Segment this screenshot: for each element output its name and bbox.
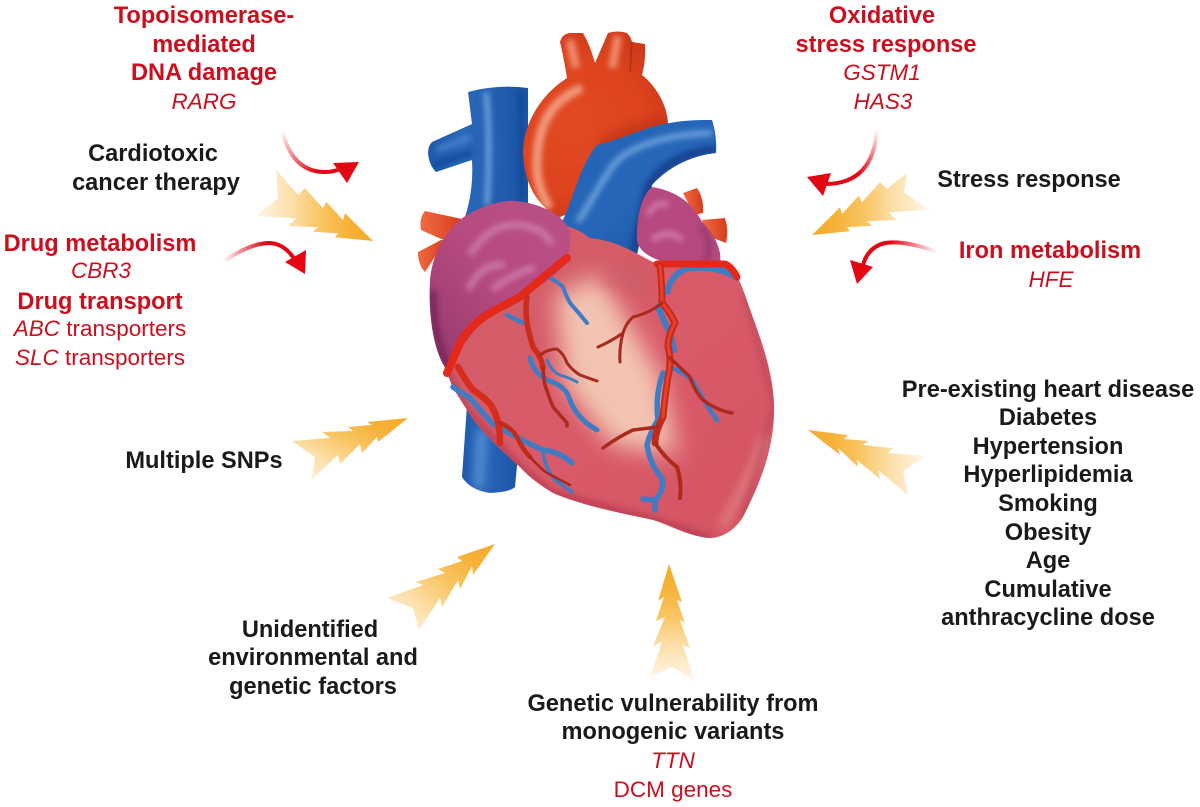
text: pre-existing risk factors: Cumulative (984, 577, 1112, 603)
text: drug metabolism and transport: CBR3 (71, 258, 131, 283)
text: pre-existing risk factors: Age (1026, 548, 1070, 574)
right atrium (430, 201, 570, 370)
text: oxidative stress response: stress response (796, 32, 976, 58)
pulmonary artery (562, 120, 716, 255)
curved arrow: drug metabolism (223, 243, 306, 274)
text: drug metabolism and transport: SLC transporters (15, 345, 185, 370)
text: topoisomerase-mediated DNA damage: DNA damage (131, 60, 277, 86)
arrow: monogenic variants (650, 564, 694, 680)
red pulmonary vein stubs, left (418, 188, 727, 272)
text: pre-existing risk factors: Hypertension (973, 434, 1123, 460)
aortic arch (523, 32, 668, 218)
text: topoisomerase-mediated DNA damage: RARG (171, 89, 237, 114)
text: cardiotoxic cancer therapy: cancer therapy (72, 170, 240, 196)
text: genetic vulnerability (527, 691, 819, 802)
text: pre-existing risk factors: Obesity (1005, 520, 1091, 546)
text: topoisomerase-mediated DNA damage: mediated (152, 32, 256, 58)
text: pre-existing risk factors: anthracycline dose (941, 605, 1155, 631)
text: unidentified factors (208, 617, 418, 700)
arrow: multiple SNPs (292, 418, 408, 479)
text: unidentified factors: Unidentified (242, 617, 378, 643)
illustration: anatomical heart (418, 32, 774, 538)
text: cardiotoxic cancer therapy (72, 141, 240, 196)
left atrium (637, 187, 720, 264)
text: oxidative stress response: HAS3 (854, 89, 913, 114)
text: topoisomerase-mediated DNA damage: Topoisomerase- (114, 3, 294, 29)
text: pre-existing risk factors (902, 377, 1194, 631)
arrow: unidentified factors (387, 544, 495, 630)
text: iron metabolism (959, 238, 1141, 292)
arrow: stress response (812, 173, 929, 235)
inferior vena cava (462, 405, 518, 493)
text: pre-existing risk factors: Pre-existing heart disease (902, 377, 1194, 403)
text: oxidative stress response: Oxidative (829, 3, 935, 29)
text: drug metabolism and transport: ABC transporters (12, 316, 186, 341)
text: unidentified factors: environmental and (208, 645, 418, 671)
superior vena cava (428, 87, 528, 225)
text: drug metabolism and transport (4, 231, 196, 370)
text: oxidative stress response: GSTM1 (843, 60, 921, 85)
text: genetic vulnerability: TTN (651, 748, 696, 773)
coronary veins (453, 268, 737, 510)
coronary arteries (447, 258, 737, 498)
text: iron metabolism: Iron metabolism (959, 238, 1141, 264)
text: iron metabolism: HFE (1028, 267, 1074, 292)
arrow: pre-existing risk factors (808, 430, 925, 495)
text: pre-existing risk factors: Smoking (998, 491, 1098, 517)
text: genetic vulnerability: Genetic vulnerability from (527, 691, 819, 717)
arrow: cardiotoxic cancer therapy (256, 170, 373, 241)
text: genetic vulnerability: DCM genes (614, 777, 732, 802)
text: pre-existing risk factors: Diabetes (999, 405, 1097, 431)
curved arrow: oxidative stress (807, 130, 877, 196)
text: drug metabolism and transport: Drug transport (17, 289, 183, 315)
text: cardiotoxic cancer therapy: Cardiotoxic (88, 141, 218, 167)
text: topoisomerase-mediated DNA damage (114, 3, 294, 114)
text: drug metabolism and transport: Drug metabolism (4, 231, 196, 257)
text: stress response: Stress response (937, 167, 1121, 193)
curved arrow: iron metabolism (850, 242, 937, 284)
ventricles (445, 226, 774, 538)
text: unidentified factors: genetic factors (229, 674, 397, 700)
text: pre-existing risk factors: Hyperlipidemia (963, 462, 1133, 488)
text: oxidative stress response (796, 3, 976, 114)
curved arrow: topoisomerase (282, 130, 359, 183)
text: genetic vulnerability: monogenic variants (562, 719, 784, 745)
text: multiple SNPs: Multiple SNPs (125, 448, 283, 474)
